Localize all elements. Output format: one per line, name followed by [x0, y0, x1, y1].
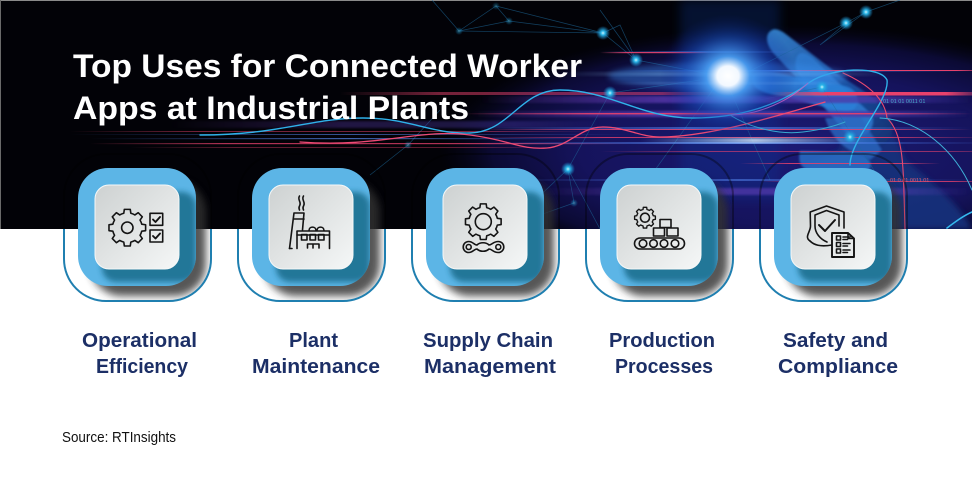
label: plant maintenance: Plant: [289, 329, 338, 352]
card: operational efficiency: [64, 154, 211, 301]
label: production processes: Processes: [615, 355, 713, 378]
icon: gear with checklist: [109, 209, 163, 246]
source note: Source: RTInsights: [62, 430, 176, 446]
icon: gear on chain: [463, 204, 504, 252]
label: supply chain management: Supply Chain: [423, 329, 553, 352]
illustration: light streaks: [70, 51, 973, 195]
label: safety and compliance: Safety and: [783, 329, 888, 352]
illustration: network lines: [370, 0, 900, 229]
card: plant maintenance: [238, 154, 385, 301]
label: safety and compliance: Compliance: [778, 355, 898, 378]
label: operational efficiency: [82, 329, 197, 378]
illustration: hand: [752, 29, 972, 229]
label: supply chain management: Management: [424, 355, 556, 378]
illustration: binary digits: 01 01 01 0011 01: [883, 99, 925, 105]
card: supply chain management: [412, 154, 559, 301]
illustration: binary digits: 01 0 01 0011 01: [890, 178, 929, 184]
card: production processes: [586, 154, 733, 301]
label: production processes: [609, 329, 715, 378]
label: safety and compliance: [778, 329, 898, 378]
icon: factory: [290, 196, 330, 248]
label: plant maintenance: [252, 329, 380, 378]
label: operational efficiency: Operational: [82, 329, 197, 352]
icon: gear and conveyor: [634, 207, 684, 249]
card: safety and compliance: [760, 154, 907, 301]
illustration: curves: [200, 70, 972, 229]
title: Top Uses for Connected Worker: [73, 48, 582, 84]
label: plant maintenance: Maintenance: [252, 355, 380, 378]
title: Apps at Industrial Plants: [73, 90, 469, 126]
label: production processes: Production: [609, 329, 715, 352]
illustration: network nodes: [404, 2, 873, 207]
illustration: glow: [608, 14, 848, 138]
icon: shield and checklist: [807, 206, 854, 257]
banner background: [0, 0, 973, 229]
label: operational efficiency: Efficiency: [96, 355, 189, 378]
title: [73, 48, 582, 126]
illustration: binary digits: [883, 99, 929, 184]
label: supply chain management: [423, 329, 556, 378]
